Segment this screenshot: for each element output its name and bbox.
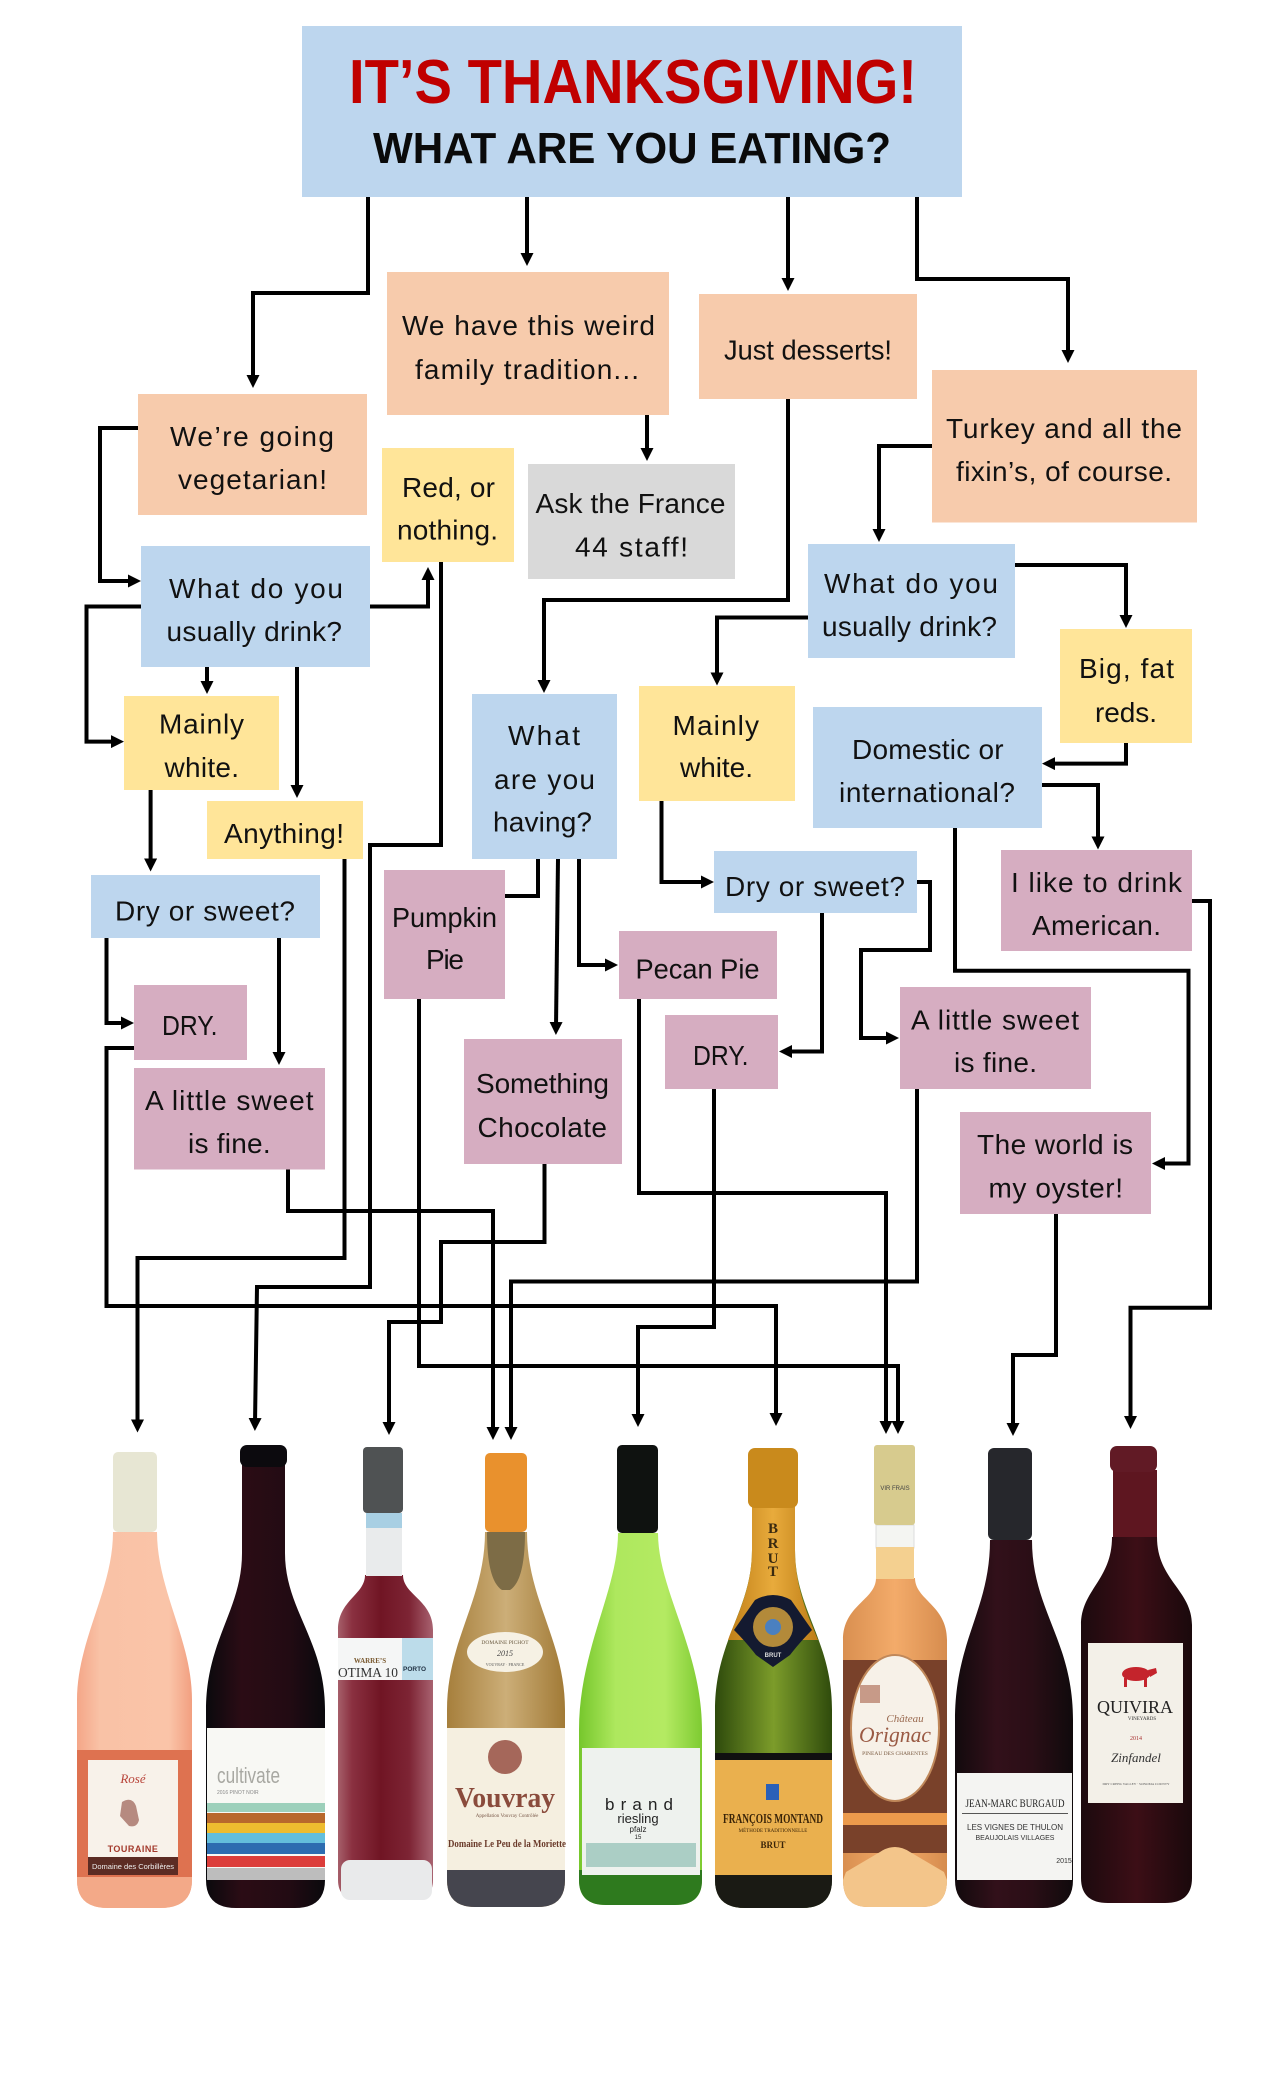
box: mainly white left: Mainly	[159, 708, 244, 740]
box: turkey: fixin’s, of course.	[956, 456, 1172, 487]
arrow: drink to mainly white via left	[86, 606, 141, 742]
box: domestic or international: international?	[839, 777, 1015, 808]
bottle: Jean-Marc Burgaud Beaujolais: LES VIGNES DE THULON	[967, 1823, 1063, 1832]
arrow: little sweet to Vouvray bottle	[288, 1170, 493, 1432]
box: what do you drink left: What do you	[169, 573, 343, 604]
box: family tradition: family tradition...	[415, 354, 639, 385]
arrow: dry or sweet to dry	[106, 938, 126, 1023]
title: It's Thanksgiving: IT’S THANKSGIVING!	[349, 48, 917, 117]
bottle: Brand riesling	[579, 1445, 702, 1905]
bottle: Jean-Marc Burgaud Beaujolais	[955, 1448, 1073, 1908]
arrow: dry or sweet to little sweet	[277, 938, 281, 1057]
flow arrows	[86, 197, 1210, 1432]
bottle: François Montand brut: T	[768, 1564, 778, 1580]
arrow: red or nothing to pinot noir bottle	[255, 562, 441, 1423]
arrow: title to family tradition	[525, 197, 529, 258]
box: I like American	[1001, 850, 1192, 951]
box: vegetarian	[138, 394, 367, 515]
bottle: François Montand brut: MÉTHODE TRADITIONNELLE	[739, 1828, 807, 1834]
box: red or nothing: nothing.	[397, 514, 498, 546]
box: what are you having: are you	[494, 764, 595, 795]
box: mainly white right: Mainly	[672, 710, 759, 741]
box: mainly white right: white.	[679, 752, 753, 783]
box: ask staff: 44 staff!	[575, 532, 688, 562]
arrow: drink to red or nothing	[370, 575, 428, 606]
box: red or nothing: Red, or	[402, 472, 495, 503]
bottle: Cultivate pinot noir: 2016 PINOT NOIR	[217, 1790, 259, 1796]
box: world is my oyster	[960, 1112, 1151, 1214]
bottle: Vouvray: 2015	[497, 1649, 513, 1658]
box: ask staff	[528, 464, 735, 579]
bottle: Touraine rosé: Domaine des Corbillères	[92, 1862, 174, 1871]
arrow: mainly white to dry or sweet right	[662, 801, 706, 882]
box: what do you drink right: usually drink?	[822, 611, 997, 642]
arrow: turkey to usual drink	[879, 446, 932, 534]
arrow: drink to anything	[295, 667, 299, 790]
box: domestic or international: Domestic or	[852, 734, 1004, 765]
box: something chocolate	[464, 1039, 622, 1164]
icon: red pig	[1122, 1667, 1157, 1687]
bottle: Warre's Otima 10 port: PORTO	[403, 1666, 426, 1673]
box: dry or sweet left	[91, 875, 320, 938]
bottle: Brand riesling: pfalz	[630, 1825, 646, 1834]
arrow: pecan pie to pineau bottle	[639, 999, 886, 1426]
bottle: Château Orignac pineau	[843, 1445, 947, 1907]
arrow: dry or sweet to dry right	[787, 913, 822, 1052]
box: dry or sweet left: Dry or sweet?	[115, 896, 295, 927]
box: something chocolate: Something	[476, 1068, 609, 1099]
arrow: having to pecan pie	[579, 859, 610, 965]
bottle: Quivira zinfandel: DRY CREEK VALLEY · SONOMA COUNTY	[1102, 1782, 1170, 1786]
box: what are you having: having?	[493, 806, 592, 838]
bottle: Warre's Otima 10 port: OTIMA 10	[338, 1666, 398, 1681]
box: dry or sweet right: Dry or sweet?	[725, 871, 905, 902]
box: world is my oyster: The world is	[977, 1129, 1133, 1160]
box: pumpkin pie: Pie	[426, 944, 464, 975]
arrow: vegetarian to what do you drink	[100, 428, 138, 581]
bottle: Cultivate pinot noir	[206, 1445, 325, 1908]
bottle: Vouvray: DOMAINE PICHOT	[481, 1640, 529, 1646]
bottle: Château Orignac pineau: Orignac	[859, 1722, 931, 1747]
box: pecan pie: Pecan Pie	[636, 954, 760, 984]
arrow: drink to mainly white	[205, 667, 209, 686]
box: big fat reds: reds.	[1095, 697, 1157, 728]
bottle: François Montand brut: U	[768, 1551, 779, 1567]
box: something chocolate: Chocolate	[478, 1112, 607, 1143]
bottle: Touraine rosé	[77, 1452, 192, 1908]
bottle: Warre's Otima 10 port: WARRE’S	[354, 1657, 386, 1665]
arrow: dry to riesling bottle	[638, 1089, 714, 1419]
bottle: Touraine rosé: Rosé	[119, 1771, 147, 1786]
bottle: Warre's Otima 10 port	[338, 1447, 433, 1900]
arrow: domestic to American	[1042, 785, 1098, 842]
box: just desserts	[699, 294, 917, 399]
bottle: Jean-Marc Burgaud Beaujolais: BEAUJOLAIS VILLAGES	[976, 1835, 1055, 1842]
arrow: having to something chocolate	[556, 859, 558, 1027]
bottle: François Montand brut: BRUT	[760, 1840, 786, 1850]
box: mainly white left	[124, 696, 279, 790]
box: turkey: Turkey and all the	[946, 413, 1182, 444]
box: a little sweet right: A little sweet	[911, 1004, 1079, 1036]
bottle: Quivira zinfandel: QUIVIRA	[1097, 1697, 1173, 1717]
box: what are you having: What	[508, 720, 580, 751]
bottle: Quivira zinfandel: 2014	[1130, 1736, 1142, 1742]
arrow: mainly white to dry or sweet	[149, 790, 153, 864]
box: a little sweet left: is fine.	[188, 1128, 271, 1159]
box: pecan pie	[619, 931, 777, 999]
bottle: Jean-Marc Burgaud Beaujolais: JEAN-MARC BURGAUD	[966, 1796, 1065, 1810]
box: domestic or international	[813, 707, 1042, 828]
box: I like American: American.	[1032, 910, 1161, 941]
arrow: pumpkin pie to pineau bottle	[419, 999, 898, 1426]
box: family tradition	[387, 272, 669, 415]
bottle: Quivira zinfandel	[1081, 1446, 1192, 1903]
arrow: title to vegetarian	[253, 197, 368, 380]
bottle: Château Orignac pineau: VIR FRAIS	[880, 1486, 910, 1492]
box: dry right	[665, 1015, 778, 1089]
bottle: Vouvray: Domaine Le Peu de la Moriette	[448, 1839, 566, 1850]
box: family tradition: We have this weird	[402, 310, 655, 341]
box: what do you drink left	[141, 546, 370, 667]
box: I like American: I like to drink	[1011, 867, 1183, 898]
arrow: American to Quivira bottle	[1130, 901, 1210, 1421]
arrow: just desserts to what are you having	[544, 399, 788, 685]
arrow: anything to rose bottle	[138, 859, 344, 1424]
bottle: François Montand brut: B	[768, 1521, 778, 1537]
box: big fat reds: Big, fat	[1079, 653, 1174, 684]
box: a little sweet left	[134, 1068, 325, 1170]
box: what are you having	[472, 694, 617, 859]
box: what do you drink right: What do you	[824, 568, 998, 599]
arrow: dry to sparkling bottle	[106, 1048, 776, 1418]
bottle: Quivira zinfandel: VINEYARDS	[1128, 1717, 1156, 1722]
bottle: Brand riesling: riesling	[617, 1811, 659, 1826]
box: big fat reds	[1060, 629, 1192, 743]
connector: having to pumpkin pie	[505, 859, 538, 896]
bottle: Château Orignac pineau: Château	[886, 1713, 924, 1725]
subtitle: What are you eating: WHAT ARE YOU EATING?	[373, 124, 891, 173]
box: a little sweet right	[900, 987, 1091, 1089]
box: ask staff: Ask the France	[536, 488, 726, 519]
box: dry right: DRY.	[693, 1040, 748, 1071]
bottle: Touraine rosé: TOURAINE	[108, 1844, 158, 1854]
arrow: little sweet to Vouvray bottle right	[511, 1089, 917, 1432]
arrow: title to just desserts	[786, 197, 790, 283]
arrow: big fat reds to domestic	[1050, 743, 1126, 764]
arrow: usual drink to mainly white right	[717, 618, 808, 678]
box: what do you drink left: usually drink?	[166, 616, 342, 647]
title panel	[302, 26, 962, 197]
bottle: Brand riesling: 15	[635, 1835, 642, 1841]
box: a little sweet right: is fine.	[954, 1047, 1037, 1078]
bottle: François Montand brut: BRUT	[765, 1653, 782, 1659]
box: anything	[207, 801, 363, 859]
box: just desserts: Just desserts!	[724, 334, 892, 366]
arrow: domestic to world is my oyster	[955, 828, 1188, 1164]
arrow: usual drink to big fat reds	[1013, 565, 1126, 620]
bottle: Jean-Marc Burgaud Beaujolais: 2015	[1056, 1858, 1072, 1865]
box: pumpkin pie	[384, 870, 505, 999]
bottle: Vouvray: VOUVRAY · FRANCE	[486, 1662, 525, 1667]
bottle: Château Orignac pineau: PINEAU DES CHARENTES	[862, 1751, 928, 1757]
bottle: François Montand brut	[715, 1448, 832, 1908]
box: dry left	[134, 985, 247, 1060]
arrow: dry or sweet to little sweet right	[861, 882, 930, 1038]
box: a little sweet left: A little sweet	[145, 1085, 314, 1116]
box: red or nothing	[382, 448, 514, 562]
arrow: family tradition to ask staff	[645, 415, 649, 453]
bottle: François Montand brut: R	[768, 1536, 779, 1552]
box: mainly white right	[639, 686, 795, 801]
arrow: oyster to Beaujolais bottle	[1013, 1214, 1056, 1428]
box: what do you drink right	[808, 544, 1015, 658]
bottle: Quivira zinfandel: Zinfandel	[1111, 1750, 1161, 1765]
box: vegetarian: vegetarian!	[178, 464, 327, 495]
bottle: Vouvray: Vouvray	[455, 1783, 555, 1814]
box: dry or sweet right	[714, 851, 917, 913]
box: mainly white left: white.	[164, 752, 239, 783]
box: pumpkin pie: Pumpkin	[392, 902, 497, 933]
box: dry left: DRY.	[162, 1010, 218, 1041]
bottle: Cultivate pinot noir: cultivate	[217, 1763, 280, 1788]
arrow: title to turkey	[917, 197, 1068, 355]
arrow: chocolate to port bottle	[389, 1164, 544, 1427]
box: turkey	[932, 370, 1197, 522]
box: world is my oyster: my oyster!	[988, 1172, 1123, 1204]
bottle: Vouvray	[447, 1453, 566, 1907]
bottle: Vouvray: Appellation Vouvray Contrôlée	[476, 1814, 539, 1819]
box: anything: Anything!	[224, 818, 344, 849]
bottle: François Montand brut: FRANÇOIS MONTAND	[723, 1812, 823, 1827]
box: vegetarian: We’re going	[170, 421, 334, 452]
bottle: Brand riesling: brand	[605, 1795, 673, 1814]
